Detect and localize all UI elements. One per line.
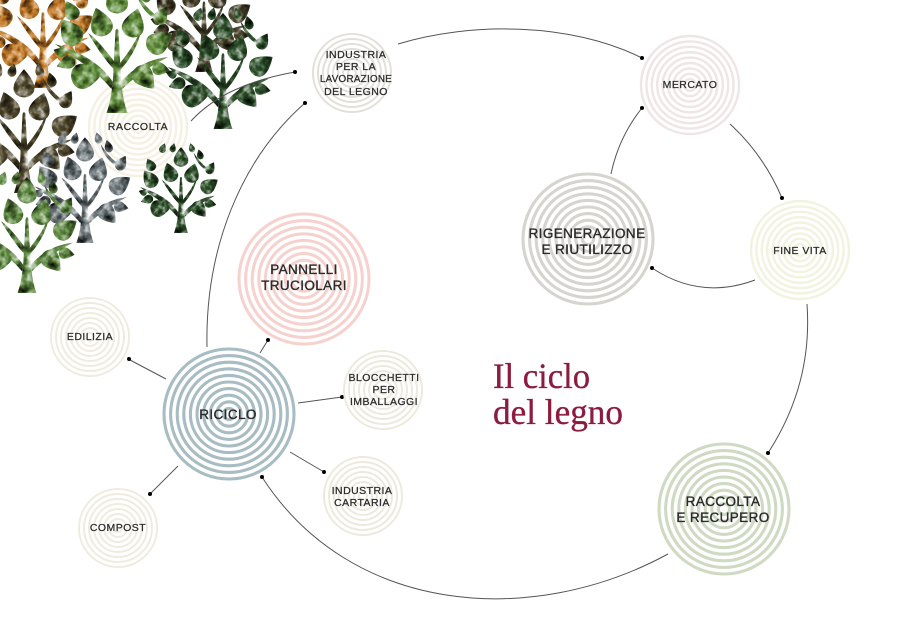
arrow: fine vita to rigenerazione — [650, 266, 755, 288]
label: raccolta: RACCOLTA — [108, 121, 168, 133]
node: industria lavorazione legno — [313, 34, 392, 112]
tree: green bottom left — [0, 170, 82, 293]
arrow: riciclo to industria — [207, 101, 307, 347]
arrow: rigenerazione to mercato — [611, 106, 644, 174]
arrow: mercato to fine vita — [730, 124, 784, 200]
arrow: raccolta to industria — [191, 70, 297, 121]
node: industria lavorazione legno: INDUSTRIA — [326, 49, 386, 61]
title — [493, 356, 623, 432]
tree: orange — [0, 0, 98, 88]
title: del legno — [493, 392, 623, 432]
arrow: industria to mercato — [398, 29, 644, 60]
tree: grey — [32, 131, 136, 243]
illustration: trees — [0, 0, 278, 293]
tree: light green top — [52, 0, 179, 113]
node: blocchetti per imballaggi — [344, 351, 422, 429]
node: industria lavorazione legno: PER LA — [336, 61, 376, 73]
node: raccolta e recupero: RACCOLTA — [686, 494, 760, 509]
node: pannelli truciolari: PANNELLI — [270, 262, 338, 277]
node: raccolta rings — [89, 78, 187, 176]
node: industria lavorazione legno: LAVORAZIONE — [320, 74, 392, 85]
node: compost: COMPOST — [90, 522, 146, 534]
node: fine vita: FINE VITA — [773, 245, 827, 257]
node: rigenerazione e riutilizzo — [523, 174, 653, 304]
arrow: riciclo to edilizia — [127, 357, 166, 379]
node: industria cartaria — [324, 457, 402, 535]
tree: dark brown behind — [149, 0, 256, 72]
tree: small dark green — [138, 142, 222, 233]
arrow: fine vita to raccolta e recupero — [766, 304, 808, 455]
arrow: riciclo to compost — [148, 466, 178, 496]
node: mercato: MERCATO — [663, 79, 717, 91]
arrow: riciclo to pannelli — [260, 338, 270, 353]
node: industria cartaria: INDUSTRIA — [332, 485, 392, 497]
arrow: riciclo to blocchetti — [298, 395, 344, 403]
node: edilizia — [51, 298, 129, 376]
node: raccolta e recupero — [659, 444, 789, 574]
node: rigenerazione e riutilizzo: E RIUTILIZZO — [541, 242, 633, 257]
node: blocchetti per imballaggi: IMBALLAGGI — [350, 396, 418, 408]
node: blocchetti per imballaggi: PER — [373, 384, 395, 396]
node: mercato — [641, 36, 739, 134]
node: riciclo — [164, 349, 294, 479]
tree: dark green right — [164, 6, 278, 129]
node: pannelli truciolari: TRUCIOLARI — [261, 278, 347, 293]
title: Il ciclo — [493, 356, 590, 396]
node: riciclo: RICICLO — [199, 407, 257, 422]
node: edilizia: EDILIZIA — [67, 331, 113, 343]
arrow: raccolta e recupero to riciclo — [260, 475, 668, 599]
node: blocchetti per imballaggi: BLOCCHETTI — [348, 372, 420, 384]
node: industria cartaria: CARTARIA — [334, 497, 390, 509]
node: rigenerazione e riutilizzo: RIGENERAZIONE — [529, 226, 645, 241]
arrow: riciclo to cartaria — [290, 452, 326, 474]
node: compost — [79, 489, 157, 567]
tree: brown large — [0, 62, 83, 193]
node: pannelli truciolari — [239, 214, 369, 344]
node: raccolta e recupero: E RECUPERO — [676, 510, 770, 525]
node: fine vita — [751, 201, 849, 299]
node: industria lavorazione legno: DEL LEGNO — [324, 86, 388, 98]
